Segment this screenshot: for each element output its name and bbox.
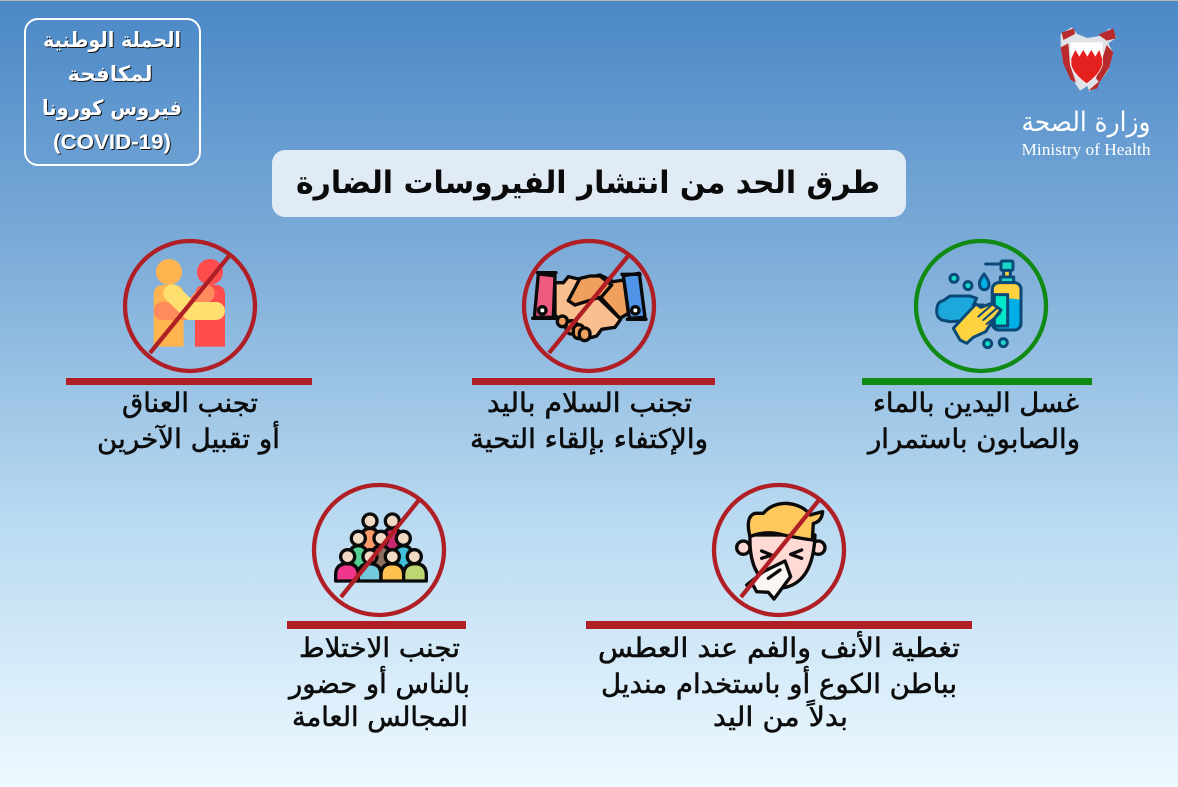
label: والإكتفاء بإلقاء التحية <box>470 424 708 455</box>
panel: avoid crowds <box>287 485 470 733</box>
label: بالناس أو حضور <box>287 665 470 700</box>
divider bar <box>862 378 1092 385</box>
campaign badge: الحملة الوطنية <box>43 28 181 52</box>
label: تجنب العناق <box>122 388 258 419</box>
title panel <box>272 150 906 217</box>
divider bar <box>586 621 972 629</box>
prohibition sign <box>125 241 255 371</box>
campaign badge: فيروس كورونا <box>42 96 182 120</box>
prohibition-style circle <box>916 241 1046 371</box>
ministry of health logo <box>1022 27 1151 159</box>
label: تجنب السلام باليد <box>487 388 692 419</box>
icon: hand washing with soap <box>937 261 1021 348</box>
divider bar <box>66 378 312 385</box>
label: تغطية الأنف والفم عند العطس <box>598 630 960 664</box>
title panel: طرق الحد من انتشار الفيروسات الضارة <box>296 165 880 201</box>
icon: hugging people <box>154 259 225 347</box>
label <box>470 388 708 455</box>
top edge line <box>0 0 1178 1</box>
label <box>97 388 280 455</box>
campaign badge: لمكافحة <box>68 62 152 86</box>
label: أو تقبيل الآخرين <box>97 420 280 455</box>
panel: wash hands <box>862 241 1092 455</box>
prohibition sign <box>714 485 844 615</box>
divider bar <box>472 378 715 385</box>
label <box>598 630 960 733</box>
panel: cover nose and mouth <box>586 485 972 733</box>
label: غسل اليدين بالماء <box>873 388 1079 419</box>
campaign badge <box>25 19 200 165</box>
prohibition sign <box>314 485 444 615</box>
label: المجالس العامة <box>292 702 468 733</box>
divider bar <box>287 621 466 629</box>
icon: bahrain coat of arms <box>1061 27 1117 92</box>
campaign badge: (COVID-19) <box>53 131 171 154</box>
label: والصابون باستمرار <box>866 424 1080 455</box>
panel: avoid hugging <box>66 241 312 455</box>
label: تجنب الاختلاط <box>299 633 460 664</box>
icon: sneezing face <box>737 503 825 599</box>
label <box>287 633 470 733</box>
english ministry name: Ministry of Health <box>1022 140 1151 159</box>
icon: crowd of people <box>336 514 426 581</box>
panel: avoid handshakes <box>470 241 715 455</box>
prohibition sign <box>524 241 654 371</box>
label <box>866 388 1080 455</box>
label: بباطن الكوع أو باستخدام منديل <box>601 665 957 700</box>
label: بدلاً من اليد <box>713 699 848 733</box>
icon: handshake <box>533 273 646 341</box>
arabic ministry name: وزارة الصحة <box>1022 107 1150 138</box>
